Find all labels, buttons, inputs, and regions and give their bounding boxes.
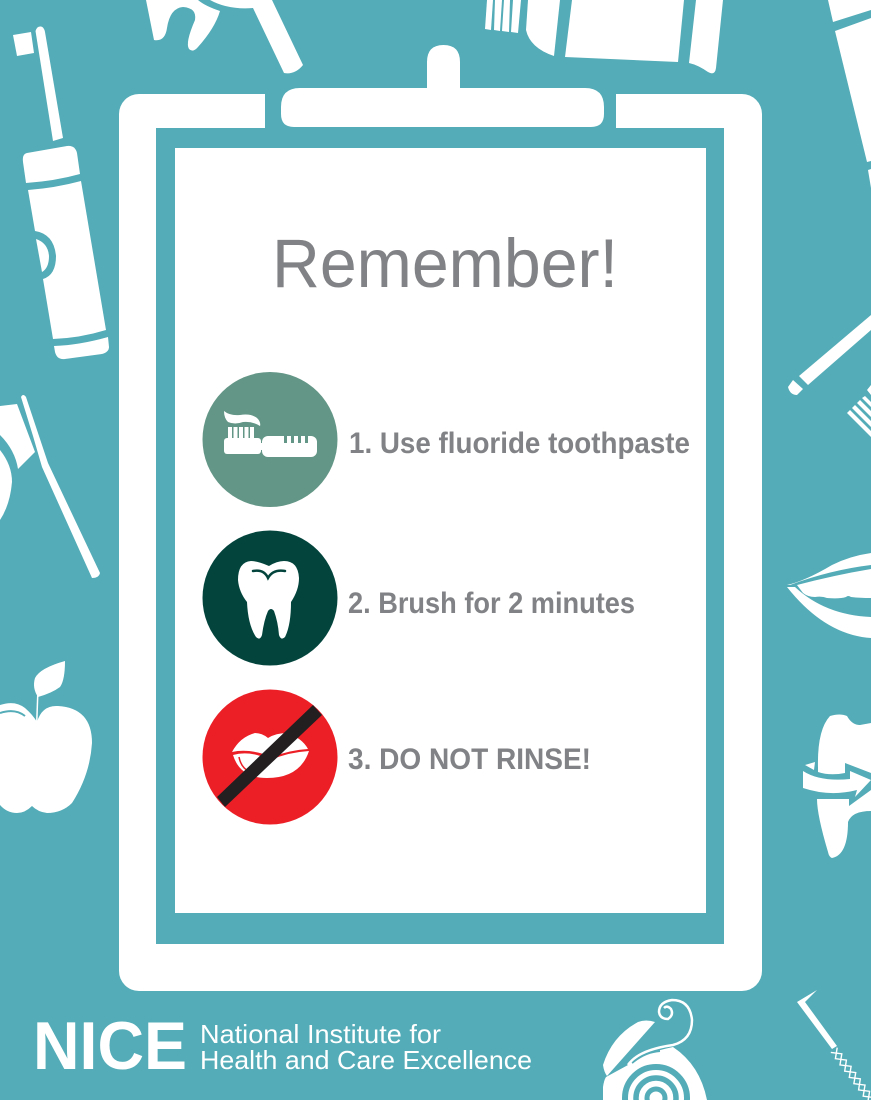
clipboard backing xyxy=(119,94,762,991)
clipboard gap xyxy=(265,88,616,128)
step 1: icon xyxy=(202,372,338,507)
icon: toothbrush at left xyxy=(0,395,100,578)
icon: tooth and brush at top xyxy=(146,0,303,73)
clipboard xyxy=(119,45,762,991)
icon: toothpaste tube at top xyxy=(485,0,723,73)
logo wordmark: NICE xyxy=(33,1008,187,1084)
logo tagline: National Institute for xyxy=(200,1019,441,1049)
icon: smiling mouth at right xyxy=(787,553,871,638)
clipboard inset xyxy=(156,128,724,944)
clip xyxy=(281,45,604,127)
title: Remember! xyxy=(272,225,618,302)
paper xyxy=(175,148,706,913)
logo: NICE xyxy=(33,1008,532,1084)
step 3: text: 3. DO NOT RINSE! xyxy=(348,743,591,776)
icon: apple xyxy=(0,661,92,813)
icon: tooth with arrow at right xyxy=(803,714,871,858)
icon: electric toothbrush xyxy=(13,26,109,359)
step 2: text: 2. Brush for 2 minutes xyxy=(348,587,635,620)
icon: tube at top right xyxy=(828,0,871,188)
step 2: icon xyxy=(202,530,338,666)
icon: dental pick xyxy=(797,990,871,1100)
logo tagline: Health and Care Excellence xyxy=(200,1045,532,1075)
step 3: icon xyxy=(202,690,338,824)
step 1: text: 1. Use fluoride toothpaste xyxy=(349,427,690,460)
icon: dental floss xyxy=(603,1000,707,1100)
icon: toothbrush at right xyxy=(788,315,871,437)
